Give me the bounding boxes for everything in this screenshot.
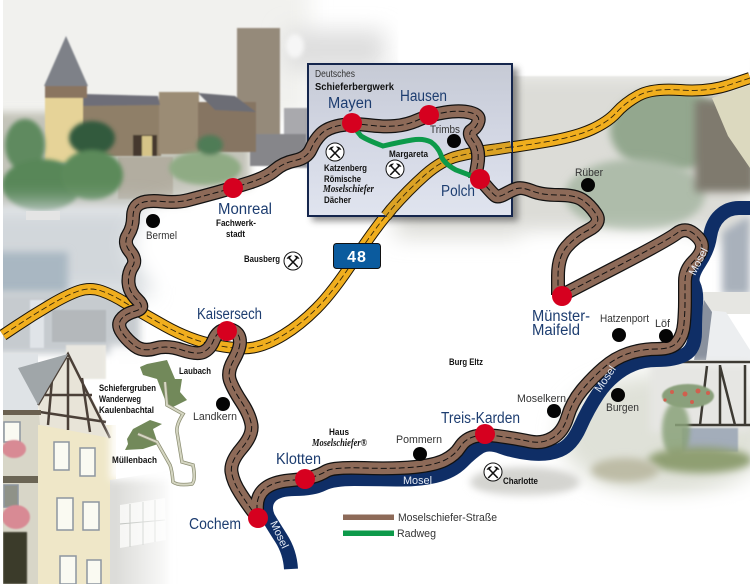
panel heading bold: Schieferbergwerk — [315, 81, 394, 93]
attraction labels: Burg Eltz — [449, 357, 483, 368]
icon: mine Bausberg — [284, 252, 302, 270]
attraction labels: Müllenbach — [112, 455, 157, 466]
icon: mine Charlotte — [484, 463, 502, 481]
towns: black dots — [146, 134, 673, 461]
attraction labels: Wanderweg — [99, 394, 141, 405]
motorway sign 48 — [334, 244, 380, 268]
motorway inside panel — [386, 147, 511, 216]
photo: foliage, upper right — [388, 76, 750, 246]
attraction labels: stadt — [226, 229, 246, 240]
attraction labels: Schiefergruben — [99, 383, 156, 394]
main stop labels: Polch — [441, 183, 475, 200]
photo: half-timbered house, lower right — [468, 215, 750, 500]
river labels: Mosel — [403, 475, 432, 487]
main stop labels: Treis-Karden — [441, 410, 520, 427]
motorway sign 48: 48 — [347, 249, 367, 266]
main stop labels: Kaisersech — [197, 306, 262, 323]
river Mosel — [266, 208, 750, 569]
town labels: Landkern — [193, 411, 237, 423]
main stop labels: Hausen — [400, 88, 447, 105]
panel heading: Deutsches — [315, 68, 355, 80]
main stop labels: Monreal — [218, 201, 272, 218]
attraction labels: Moselschiefer — [322, 184, 374, 195]
town labels: Rüber — [575, 167, 603, 179]
town labels: Bermel — [146, 230, 177, 242]
attraction labels: Römische — [324, 174, 361, 185]
town labels: Pommern — [396, 434, 442, 446]
cycle path: Radweg — [352, 125, 480, 179]
town labels: Burgen — [606, 402, 639, 414]
scenic road: Moselschiefer-Straße — [119, 111, 702, 518]
main stop labels — [189, 88, 590, 533]
motorway A48 — [3, 78, 750, 348]
town labels: Löf — [655, 318, 671, 330]
main stop labels: Mayen — [328, 95, 372, 112]
town labels: Moselkern — [517, 393, 566, 405]
attraction labels: Moselschiefer® — [311, 438, 367, 449]
attraction labels: Dächer — [324, 195, 351, 206]
attraction labels: Charlotte — [503, 476, 538, 487]
river labels: Mosel — [687, 246, 711, 277]
river labels: Mosel — [593, 364, 619, 395]
inset panel: Deutsches Schieferbergwerk — [308, 64, 512, 216]
main stop labels: Münster- — [532, 308, 590, 325]
legend: Radweg — [397, 528, 436, 540]
attraction labels: Katzenberg — [324, 163, 367, 174]
attraction labels: Margareta — [389, 149, 429, 160]
attraction labels — [99, 149, 538, 487]
attraction labels: Kaulenbachtal — [99, 405, 154, 416]
legend — [343, 512, 497, 540]
river labels: Mosel — [267, 519, 290, 551]
attraction labels: Laubach — [179, 366, 211, 377]
river labels — [267, 246, 711, 551]
town labels: Hatzenport — [600, 313, 649, 325]
main stop labels: Cochem — [189, 516, 241, 533]
icon: mine Margareta — [386, 160, 404, 178]
inset panel shadow — [312, 68, 518, 221]
attraction labels: Bausberg — [244, 254, 280, 265]
hiking area: Schiefergruben Wanderweg Kaulenbachtal — [125, 360, 194, 485]
attraction labels: Fachwerk- — [216, 218, 256, 229]
town labels: Trimbs — [430, 124, 460, 136]
town labels — [146, 124, 671, 446]
icon: mine Katzenberg — [326, 143, 344, 161]
attraction labels: Haus — [329, 427, 349, 438]
main stop labels: Klotten — [276, 451, 321, 468]
photo: half-timbered houses, lower left — [3, 290, 165, 584]
photo: castle and trees — [0, 0, 385, 295]
main stops: red dots — [217, 105, 572, 528]
legend: Moselschiefer-Straße — [398, 512, 497, 524]
main stop labels: Maifeld — [532, 322, 580, 339]
